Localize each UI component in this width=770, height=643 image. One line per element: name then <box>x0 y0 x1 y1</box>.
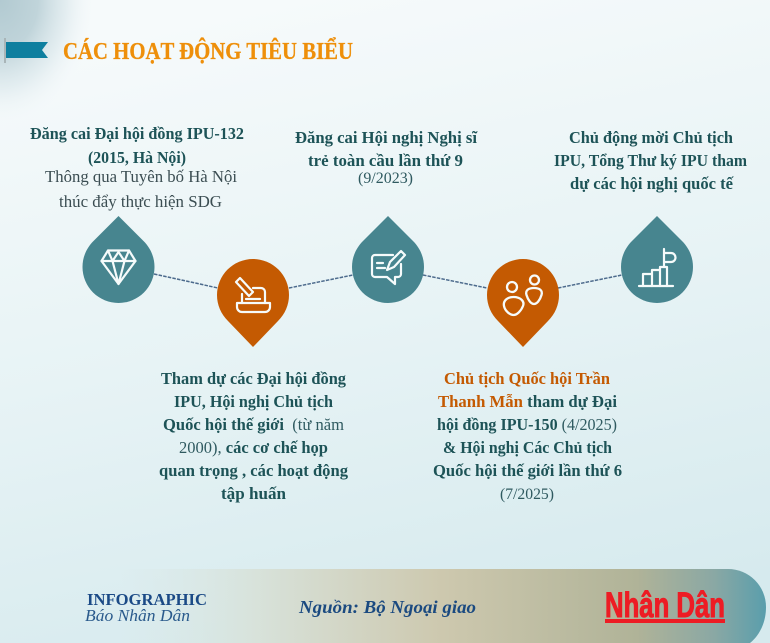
icon: diamond <box>102 250 136 284</box>
text block: attending IPU assemblies: quan trọng , các hoạt động <box>159 461 349 480</box>
pin 1: diamond icon <box>82 216 154 303</box>
text block: Chairman Tran Thanh Man <box>433 369 622 503</box>
header ribbon icon <box>4 38 48 63</box>
text block: attending IPU assemblies: IPU, Hội nghị Chủ tịch <box>174 392 333 411</box>
text block: attending IPU assemblies: 2000), các cơ chế họp <box>179 438 328 457</box>
text block: attending IPU assemblies <box>159 369 349 503</box>
text block: young parliamentarians: Đăng cai Hội nghị Nghị sĩ <box>295 128 478 147</box>
text block: IPU-132 <box>30 124 244 211</box>
dashed connector line 3 <box>423 275 487 288</box>
text block: inviting IPU leaders: dự các hội nghị quốc tế <box>570 174 735 193</box>
icon: bars and flag <box>639 249 676 286</box>
text block: attending IPU assemblies: Tham dự các Đại hội đồng <box>161 369 347 388</box>
pin 3: note and speech icon <box>352 216 424 303</box>
text block: inviting IPU leaders: Chủ động mời Chủ tịch <box>569 128 733 147</box>
icon: speech bubble with pencil <box>372 251 405 284</box>
footer: publisher label: Báo Nhân Dân <box>85 606 190 625</box>
text block: young parliamentarians: (9/2023) <box>358 170 413 187</box>
text block: inviting IPU leaders: IPU, Tổng Thư ký IPU tham <box>554 151 747 170</box>
icon: two people <box>504 276 542 315</box>
text block: attending IPU assemblies: Quốc hội thế giới (từ năm <box>163 415 344 434</box>
title: CÁC HOẠT ĐỘNG TIÊU BIỂU <box>63 38 353 65</box>
text block: IPU-132: thúc đẩy thực hiện SDG <box>59 192 222 211</box>
text block: Chairman Tran Thanh Man: Quốc hội thế giới lần thứ 6 <box>433 461 622 480</box>
footer: publisher label: INFOGRAPHIC <box>87 590 207 609</box>
dashed connector line 4 <box>558 275 622 288</box>
text block: Chairman Tran Thanh Man: Thanh Mẫn tham dự Đại <box>438 392 617 411</box>
pin 2: voting icon <box>217 259 289 347</box>
text block: IPU-132: (2015, Hà Nội) <box>88 148 186 167</box>
text block: IPU-132: Đăng cai Đại hội đồng IPU-132 <box>30 124 244 143</box>
pin 4: people icon <box>487 259 559 347</box>
footer: publisher label <box>85 590 207 625</box>
icon: gavel and desk <box>236 278 270 312</box>
logo: Nhân Dân: Nhân Dân <box>605 586 725 625</box>
text block: IPU-132: Thông qua Tuyên bố Hà Nội <box>45 167 237 186</box>
text block: young parliamentarians <box>295 128 478 187</box>
dashed connector line 1 <box>154 274 218 288</box>
text block: attending IPU assemblies: tập huấn <box>221 484 286 503</box>
footer banner <box>120 569 766 643</box>
text block: Chairman Tran Thanh Man: Chủ tịch Quốc hội Trần <box>444 369 610 388</box>
text block: young parliamentarians: trẻ toàn cầu lần thứ 9 <box>308 151 463 170</box>
dashed connector line 2 <box>289 275 353 288</box>
text block: Chairman Tran Thanh Man: & Hội nghị Các Chủ tịch <box>443 438 612 457</box>
footer: source: Nguồn: Bộ Ngoại giao <box>298 597 476 617</box>
text block: Chairman Tran Thanh Man: hội đồng IPU-150 (4/2025) <box>437 415 617 434</box>
pin 5: growth chart with flag icon <box>621 216 693 303</box>
text block: Chairman Tran Thanh Man: (7/2025) <box>500 486 554 503</box>
text block: inviting IPU leaders <box>554 128 747 193</box>
